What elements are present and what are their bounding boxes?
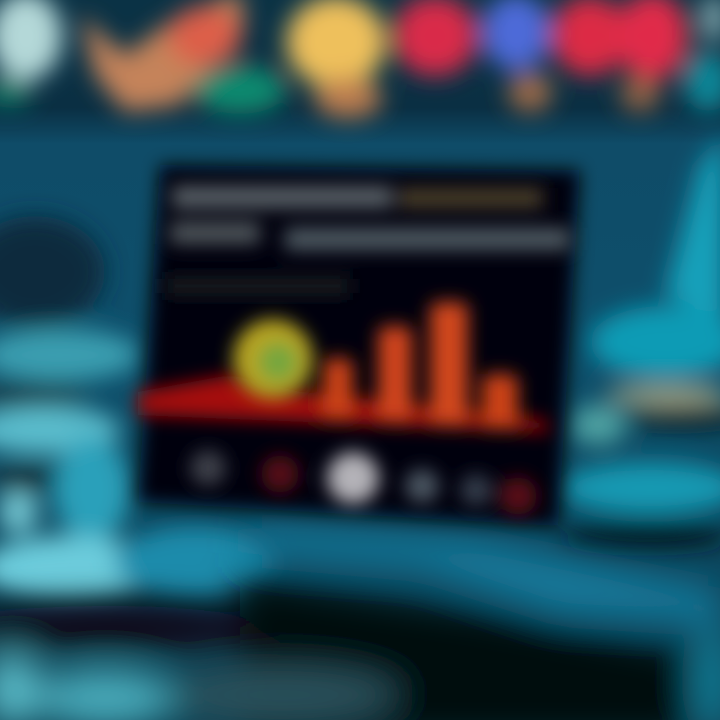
top row of coloured bubbles: [0, 0, 720, 118]
panel background: [138, 165, 580, 526]
bottom dark band and ripples: [0, 525, 720, 720]
circular gauge: [233, 319, 313, 399]
title text block (blurred): [165, 186, 570, 294]
panel: dark dashboard: [138, 165, 580, 526]
left teal waves: [0, 216, 275, 600]
bar chart: [138, 302, 550, 432]
bottom icon row: [190, 450, 537, 515]
right teal waves: [560, 135, 720, 548]
